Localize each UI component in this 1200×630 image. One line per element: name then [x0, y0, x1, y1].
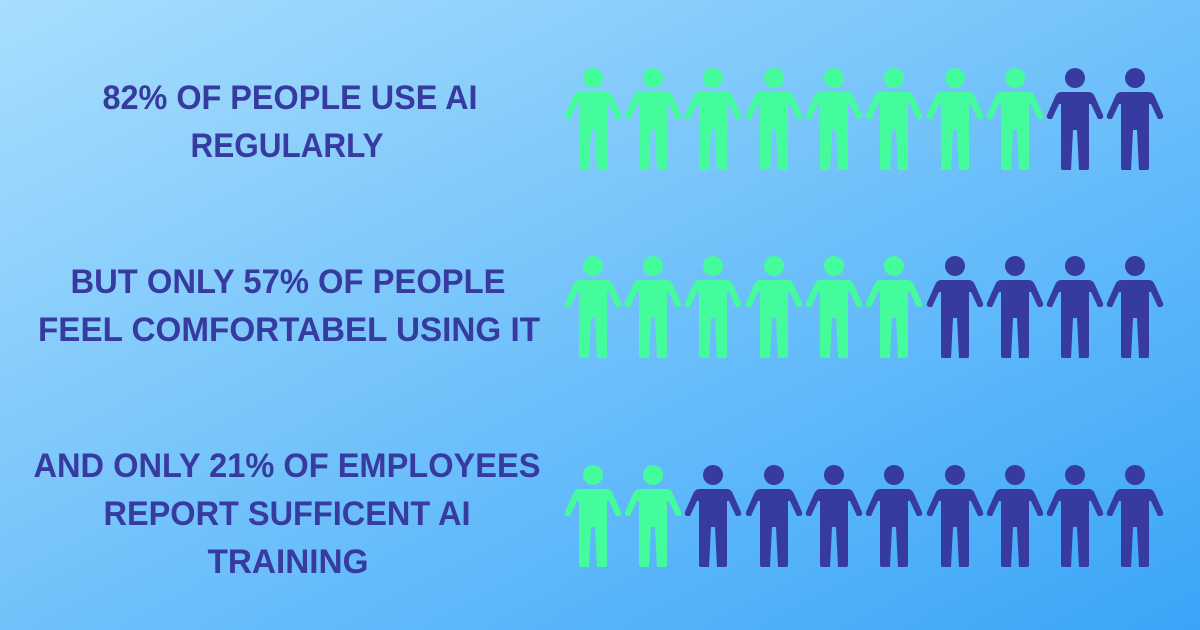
text: stat 3: AND ONLY 21% OF EMPLOYEES [34, 447, 540, 485]
text: stat 3: TRAINING [208, 543, 368, 581]
text: stat 2: BUT ONLY 57% OF PEOPLE [70, 263, 506, 301]
text: stat 2: FEEL COMFORTABEL USING IT [38, 311, 540, 349]
text: stat 1 [102, 79, 478, 165]
text: stat 1: 82% OF PEOPLE USE AI [102, 79, 478, 117]
icons: row 2 (6 of 10) [565, 256, 1163, 358]
icons: row 1 (8 of 10) [565, 68, 1163, 170]
text: stat 3: REPORT SUFFICENT AI [104, 495, 470, 533]
text: stat 1: REGULARLY [190, 127, 384, 165]
text: stat 3 [34, 447, 540, 581]
icons: row 3 (2 of 10) [565, 465, 1163, 567]
text: stat 2 [38, 263, 540, 349]
